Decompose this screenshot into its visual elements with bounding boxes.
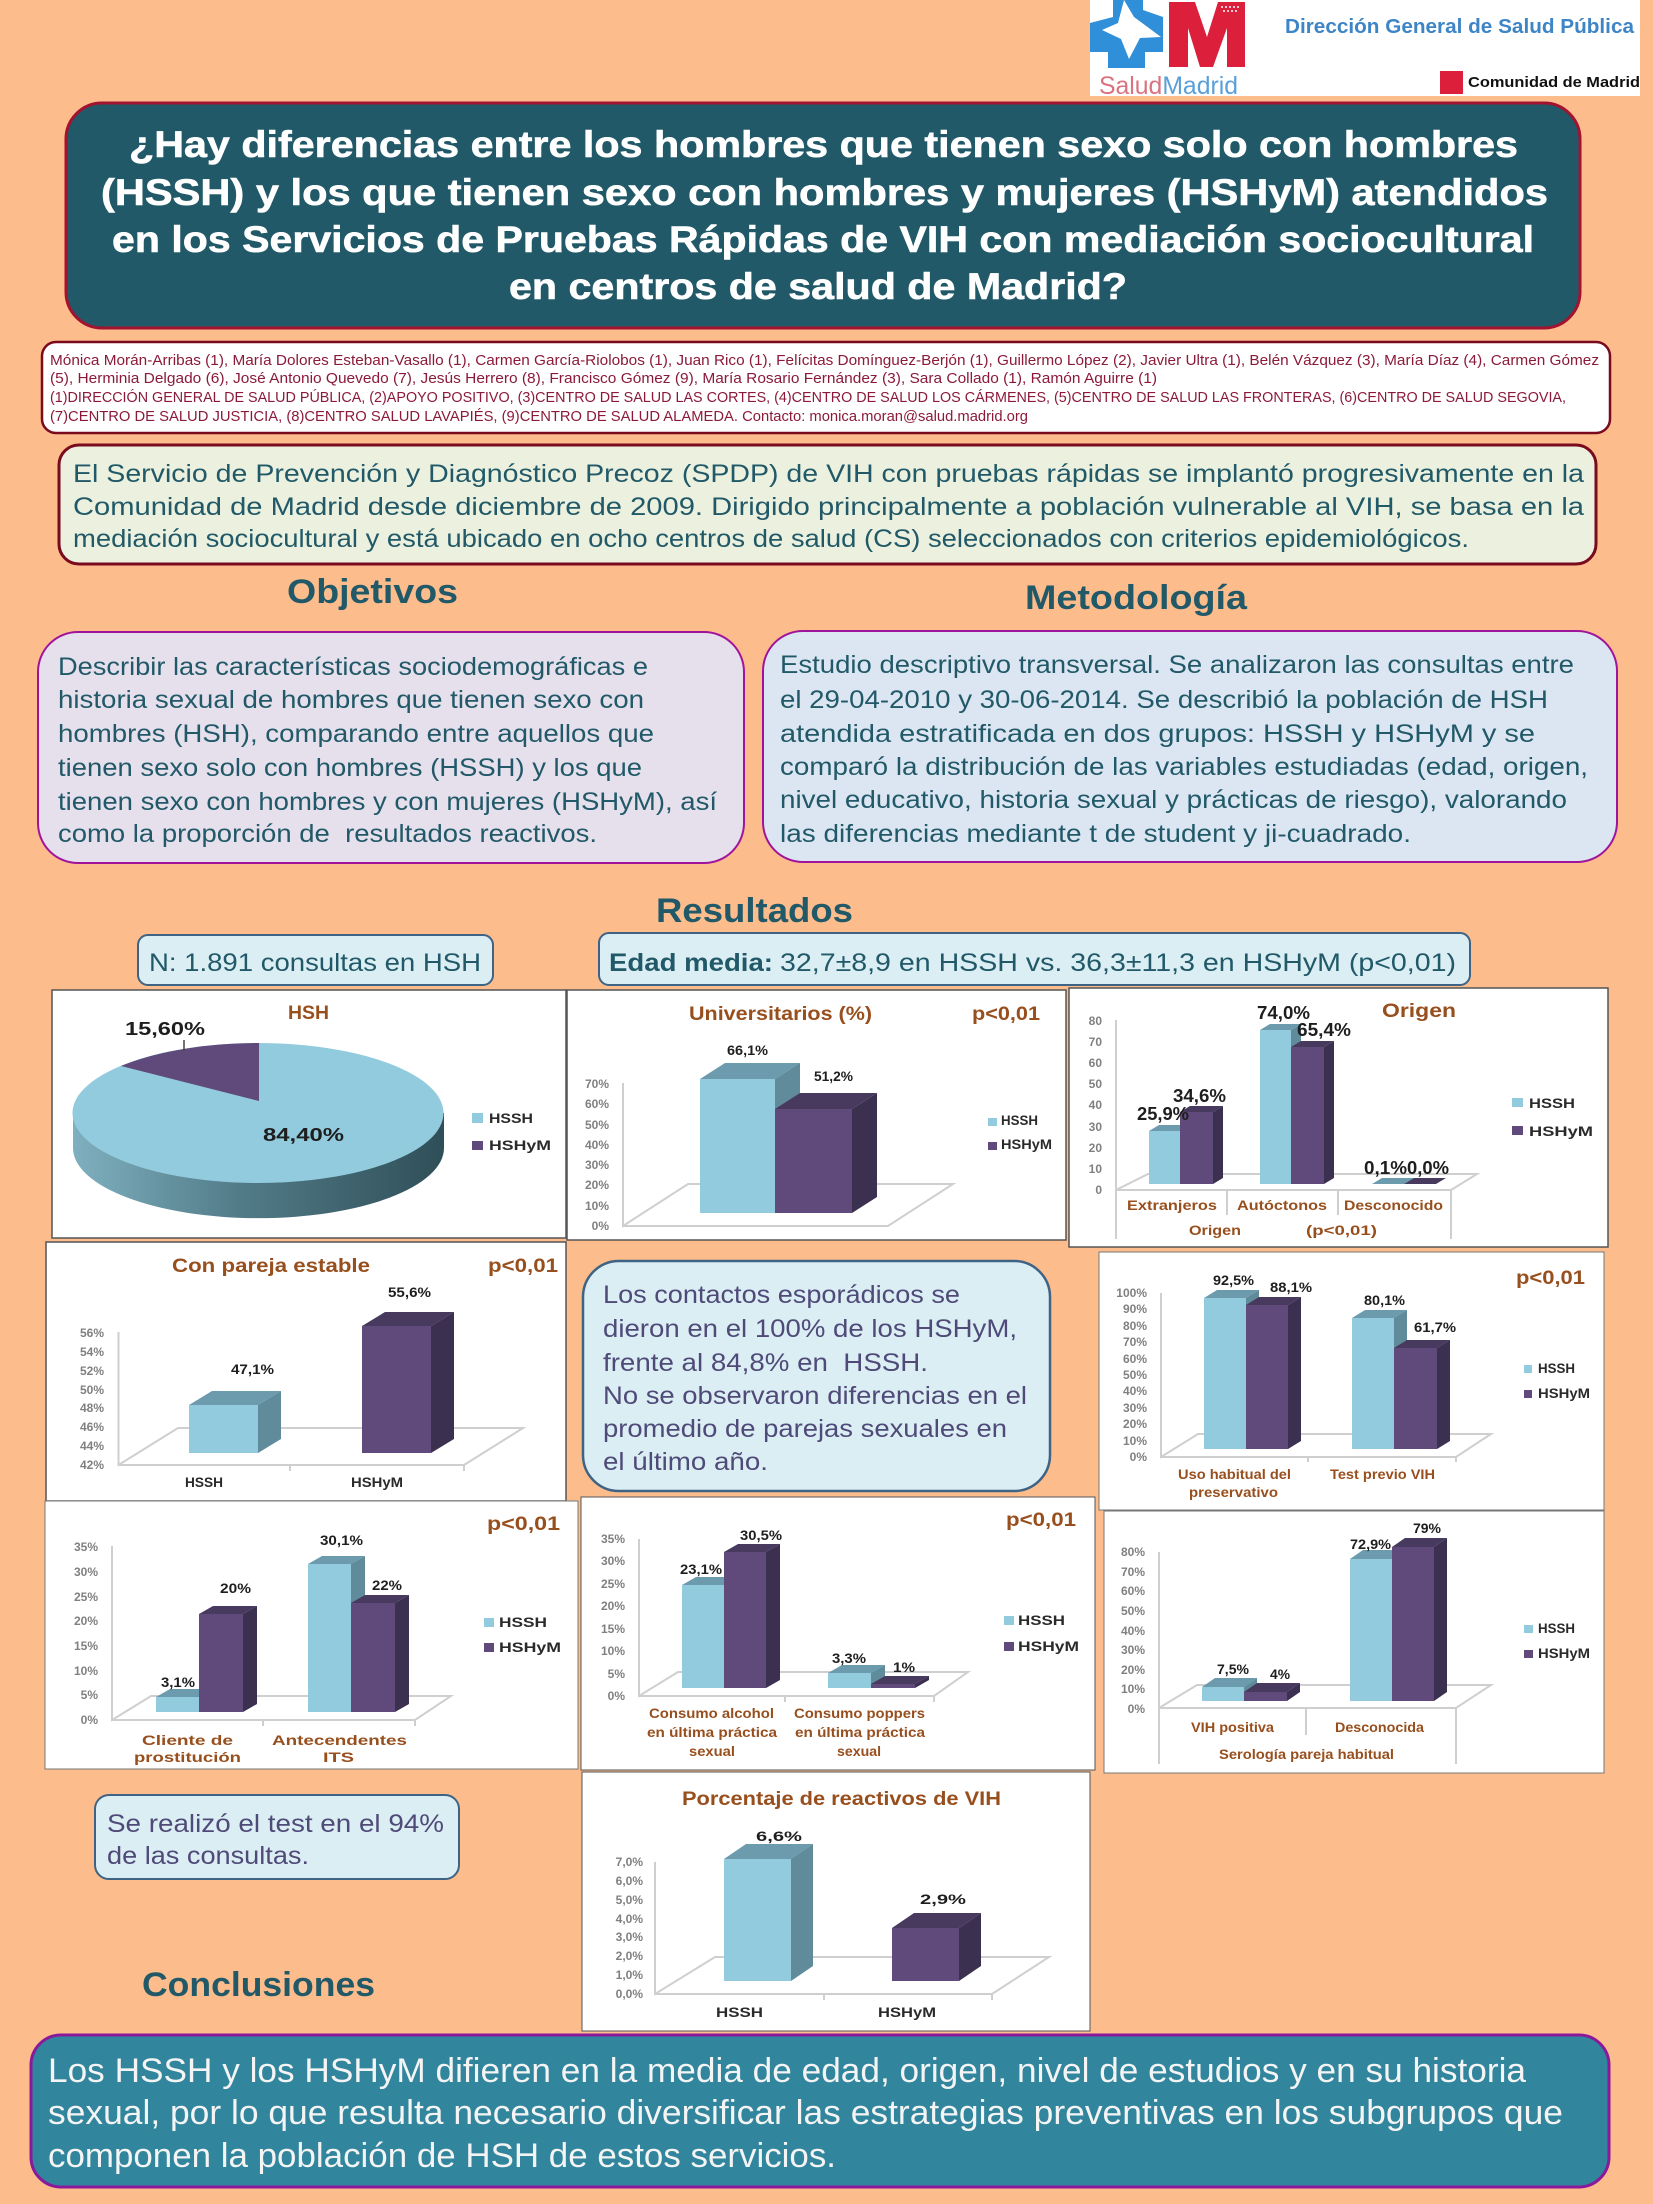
category labels: VIH positiva	[1191, 1719, 1274, 1735]
authors text: Mónica Morán-Arribas (1), María Dolores Esteban-Vasallo (1), Carmen García-Riolobos (1), Juan Rico (1), Felícitas Domínguez-Berjón (1), Guillermo López (2), Javier Ultra (1), Belén Vázquez (3), María Díaz (4), Carmen Gómez	[50, 352, 1599, 369]
objetivos text	[58, 653, 717, 848]
chart: serología pareja habitual	[1104, 1511, 1604, 1773]
logo text: Dirección General de Salud Pública: Dirección General de Salud Pública	[1285, 16, 1635, 38]
legend	[1524, 1360, 1590, 1401]
category labels: HSSH	[716, 2004, 763, 2020]
value labels: 3,1%	[161, 1674, 196, 1690]
axis: 40%	[1121, 1624, 1145, 1638]
axis: 15%	[74, 1639, 98, 1653]
axis: 100%	[1116, 1286, 1147, 1300]
value labels: 3,3%	[832, 1650, 867, 1666]
value labels: 0,1%	[1364, 1158, 1407, 1178]
title text: ¿Hay diferencias entre los hombres que tienen sexo solo con hombres	[129, 124, 1518, 165]
heading: Conclusiones: Conclusiones	[142, 1966, 375, 2004]
chart: cliente de prostitución y antecedentes ITS	[45, 1501, 578, 1769]
axis: 20%	[74, 1614, 98, 1628]
axis: 70	[1089, 1035, 1102, 1049]
axis: 20	[1089, 1141, 1102, 1155]
axis: 48%	[80, 1401, 104, 1415]
value labels: 88,1%	[1270, 1279, 1313, 1295]
axis: 35%	[601, 1532, 625, 1546]
category labels: en última práctica	[795, 1724, 925, 1740]
objetivos text: tienen sexo con hombres y con mujeres (HSHyM), así	[58, 788, 717, 816]
metodología text: Estudio descriptivo transversal. Se analizaron las consultas entre	[780, 651, 1574, 679]
callout text: dieron en el 100% de los HSHyM,	[603, 1315, 1017, 1343]
callout text	[603, 1281, 1027, 1476]
axis: 50%	[1123, 1368, 1147, 1382]
value labels: 1%	[893, 1659, 916, 1675]
logo text: SaludMadrid: SaludMadrid	[1099, 72, 1238, 100]
heading: Resultados: Resultados	[656, 892, 853, 930]
category labels	[1191, 1719, 1424, 1762]
category labels: HSHyM	[878, 2004, 936, 2020]
metodología text: comparó la distribución de las variables estudiadas (edad, origen,	[780, 753, 1588, 781]
authors text: (7)CENTRO DE SALUD JUSTICIA, (8)CENTRO SALUD LAVAPIÉS, (9)CENTRO DE SALUD ALAMEDA. Contacto: monica.moran@salud.madrid.org	[50, 408, 1028, 425]
axis: 2,0%	[616, 1949, 643, 1963]
bars	[1202, 1538, 1447, 1701]
logo text: Comunidad de Madrid: Comunidad de Madrid	[1468, 74, 1640, 91]
category labels: sexual	[689, 1743, 735, 1759]
value labels: 65,4%	[1297, 1020, 1351, 1040]
axis: 0,0%	[616, 1987, 643, 2001]
chart: preservativo y test previo	[1099, 1252, 1604, 1510]
value labels: 79%	[1413, 1520, 1442, 1536]
axis: 7,0%	[616, 1855, 643, 1869]
category labels: Origen	[1189, 1222, 1241, 1238]
value labels: 20%	[220, 1580, 252, 1596]
value labels: 55,6%	[388, 1284, 432, 1300]
category labels	[134, 1732, 407, 1765]
axis: 10%	[1123, 1434, 1147, 1448]
value labels: 66,1%	[727, 1042, 769, 1058]
callout: N consultas	[138, 935, 493, 985]
value labels: 25,9%	[1137, 1104, 1189, 1124]
bars	[700, 1063, 877, 1213]
axis: 3,0%	[616, 1930, 643, 1944]
introduction text: mediación sociocultural y está ubicado en ocho centros de salud (CS) seleccionados con criterios epidemiológicos.	[73, 525, 1469, 553]
axis: 25%	[601, 1577, 625, 1591]
axis: 30%	[1121, 1643, 1145, 1657]
category labels: prostitución	[134, 1749, 241, 1765]
callout: edad media	[599, 933, 1470, 985]
objetivos text: hombres (HSH), comparando entre aquellos que	[58, 720, 654, 748]
chart title: Origen	[1382, 1001, 1456, 1022]
legend: HSHyM	[1529, 1123, 1593, 1139]
pie labels: 15,60%	[125, 1019, 205, 1039]
icon: Comunidad de Madrid flag	[1440, 71, 1463, 94]
value labels: 80,1%	[1364, 1292, 1406, 1308]
category labels	[647, 1705, 925, 1759]
axis: 46%	[80, 1420, 104, 1434]
chart: universitarios	[567, 990, 1066, 1240]
axis: 5,0%	[616, 1893, 643, 1907]
metodología text: las diferencias mediante t de student y ji-cuadrado.	[780, 820, 1411, 848]
axis: 30	[1089, 1120, 1102, 1134]
axis: 5%	[608, 1667, 625, 1681]
axis: 50%	[80, 1383, 104, 1397]
axis: 6,0%	[616, 1874, 643, 1888]
axis: 10%	[74, 1664, 98, 1678]
p value: p<0,01	[488, 1256, 559, 1277]
callout: test realizado: de las consultas.	[107, 1842, 309, 1870]
legend: HSHyM	[1538, 1645, 1590, 1661]
bars	[724, 1844, 981, 1981]
icon: M stars	[1221, 6, 1239, 12]
axis: 30%	[585, 1158, 609, 1172]
chart title: Con pareja estable	[172, 1256, 370, 1277]
title panel	[66, 103, 1580, 328]
category labels: Uso habitual del	[1178, 1466, 1291, 1482]
title text: en centros de salud de Madrid?	[509, 266, 1127, 307]
callout text: promedio de parejas sexuales en	[603, 1415, 1007, 1443]
chart title: Porcentaje de reactivos de VIH	[682, 1789, 1001, 1810]
value labels	[231, 1284, 432, 1377]
axis: 30%	[1123, 1401, 1147, 1415]
axis: 0%	[1128, 1702, 1145, 1716]
panel: objetivos	[38, 632, 744, 863]
category labels: Cliente de	[142, 1732, 233, 1748]
callout: test realizado: Se realizó el test en el 94%	[107, 1810, 444, 1838]
heading: Metodología: Metodología	[1025, 579, 1248, 617]
axis: 80	[1089, 1014, 1102, 1028]
category labels: Test previo VIH	[1330, 1466, 1435, 1482]
value labels: 30,5%	[740, 1527, 783, 1543]
axis: 10%	[1121, 1682, 1145, 1696]
introduction text	[73, 460, 1584, 553]
objetivos text: historia sexual de hombres que tienen sexo con	[58, 686, 644, 714]
value labels	[161, 1532, 403, 1690]
value labels	[1213, 1272, 1457, 1335]
axis	[74, 1540, 451, 1727]
axis: 40	[1089, 1098, 1102, 1112]
axis: 60%	[1123, 1352, 1147, 1366]
axis: 30%	[74, 1565, 98, 1579]
conclusiones text	[48, 2052, 1563, 2175]
axis: 54%	[80, 1345, 104, 1359]
axis	[616, 1855, 1049, 2001]
legend: HSHyM	[1538, 1385, 1590, 1401]
category labels: preservativo	[1189, 1484, 1278, 1500]
pie labels: 84,40%	[263, 1125, 344, 1145]
metodología text	[780, 651, 1588, 848]
value labels	[756, 1828, 967, 1907]
conclusiones text: componen la población de HSH de estos servicios.	[48, 2137, 836, 2175]
legend	[484, 1614, 561, 1655]
axis: 60	[1089, 1056, 1102, 1070]
conclusiones text: sexual, por lo que resulta necesario diversificar las estrategias preventivas en los subgrupos que	[48, 2094, 1563, 2132]
axis: 5%	[81, 1688, 98, 1702]
axis: 20%	[585, 1178, 609, 1192]
axis: 50%	[585, 1118, 609, 1132]
axis: 0%	[608, 1689, 625, 1703]
axis: 0%	[1130, 1450, 1147, 1464]
legend	[1524, 1620, 1590, 1661]
axis: 40%	[1123, 1384, 1147, 1398]
metodología text: atendida estratificada en dos grupos: HSSH y HSHyM y se	[780, 720, 1535, 748]
axis: 0	[1095, 1183, 1102, 1197]
icon: white star	[1102, 0, 1161, 59]
axis: 50	[1089, 1077, 1102, 1091]
axis	[1121, 1545, 1491, 1764]
category labels	[1178, 1466, 1435, 1500]
axis: 20%	[1121, 1663, 1145, 1677]
chart: consumo alcohol y poppers	[581, 1497, 1095, 1770]
category labels: Antecendentes	[272, 1732, 407, 1748]
legend: HSSH	[1538, 1360, 1575, 1376]
category labels: Autóctonos	[1237, 1197, 1327, 1213]
axis: 30%	[601, 1554, 625, 1568]
callout text: No se observaron diferencias en el	[603, 1382, 1027, 1410]
legend: HSSH	[489, 1110, 533, 1126]
category labels: en última práctica	[647, 1724, 777, 1740]
axis	[1116, 1286, 1491, 1464]
legend: HSSH	[499, 1614, 547, 1630]
axis: 60%	[585, 1097, 609, 1111]
authors text	[50, 352, 1599, 425]
category labels: (p<0,01)	[1306, 1222, 1377, 1238]
objetivos text: tienen sexo solo con hombres (HSSH) y los que	[58, 754, 642, 782]
value labels: 0,0%	[1407, 1158, 1449, 1178]
category labels: ITS	[323, 1749, 354, 1765]
category labels: HSSH	[185, 1474, 223, 1490]
axis: 56%	[80, 1326, 104, 1340]
value labels	[727, 1042, 854, 1084]
axis: 50%	[1121, 1604, 1145, 1618]
callout text: el último año.	[603, 1448, 768, 1476]
chart: con pareja estable	[46, 1242, 566, 1501]
legend: HSSH	[1001, 1112, 1038, 1128]
p value: p<0,01	[1006, 1510, 1077, 1531]
legend: HSSH	[1538, 1620, 1575, 1636]
category labels: Consumo alcohol	[649, 1705, 774, 1721]
value labels: 6,6%	[756, 1828, 803, 1844]
value labels: 74,0%	[1257, 1003, 1310, 1023]
category labels	[1127, 1197, 1443, 1238]
metodología text: el 29-04-2010 y 30-06-2014. Se describió la población de HSH	[780, 686, 1548, 714]
axis: 20%	[1123, 1417, 1147, 1431]
legend	[1004, 1612, 1079, 1654]
callout: edad media: Edad media:	[609, 949, 773, 977]
value labels: 47,1%	[231, 1361, 275, 1377]
axis: 70%	[585, 1077, 609, 1091]
title text: en los Servicios de Pruebas Rápidas de VIH con mediación sociocultural	[112, 219, 1534, 260]
metodología text: nivel educativo, historia sexual y prácticas de riesgo), valorando	[780, 786, 1567, 814]
category labels	[716, 2004, 936, 2020]
category labels: sexual	[837, 1743, 881, 1759]
callout: contactos esporádicos	[583, 1261, 1050, 1491]
pie	[72, 1040, 444, 1218]
axis: 40%	[585, 1138, 609, 1152]
axis: 15%	[601, 1622, 625, 1636]
category labels: Extranjeros	[1127, 1197, 1217, 1213]
title text	[101, 124, 1548, 307]
axis: 25%	[74, 1590, 98, 1604]
axis: 10	[1089, 1162, 1102, 1176]
callout: N consultas: N: 1.891 consultas en HSH	[149, 949, 481, 977]
legend	[988, 1112, 1052, 1152]
chart: origen	[1069, 988, 1608, 1247]
category labels: HSHyM	[351, 1474, 403, 1490]
chart: HSH pie	[52, 990, 566, 1238]
legend: HSHyM	[499, 1639, 561, 1655]
value labels: 92,5%	[1213, 1272, 1255, 1288]
axis	[80, 1326, 523, 1472]
axis: 90%	[1123, 1302, 1147, 1316]
axis	[585, 1077, 953, 1233]
axis: 60%	[1121, 1584, 1145, 1598]
category labels: Desconocido	[1344, 1197, 1443, 1213]
value labels: 34,6%	[1173, 1086, 1226, 1106]
axis: 70%	[1121, 1565, 1145, 1579]
legend: HSHyM	[1001, 1136, 1052, 1152]
legend	[1512, 1095, 1593, 1139]
p value: p<0,01	[487, 1514, 561, 1535]
category labels: Consumo poppers	[794, 1705, 925, 1721]
callout text: Los contactos esporádicos se	[603, 1281, 960, 1309]
axis: 35%	[74, 1540, 98, 1554]
value labels	[1137, 1003, 1449, 1178]
axis: 70%	[1123, 1335, 1147, 1349]
p value: p<0,01	[1516, 1268, 1585, 1289]
pie labels	[125, 1019, 344, 1145]
introduction panel	[59, 445, 1596, 564]
legend	[472, 1110, 551, 1153]
chart title: Universitarios (%)	[689, 1004, 872, 1025]
value labels: 72,9%	[1350, 1536, 1392, 1552]
axis: 42%	[80, 1458, 104, 1472]
value labels: 2,9%	[920, 1891, 967, 1907]
panel: conclusiones	[31, 2035, 1609, 2187]
bars	[682, 1544, 929, 1688]
value labels: 30,1%	[320, 1532, 364, 1548]
legend: HSHyM	[489, 1137, 551, 1153]
value labels: 22%	[372, 1577, 403, 1593]
category labels	[185, 1474, 403, 1490]
heading: Objetivos: Objetivos	[287, 573, 458, 611]
axis: 80%	[1121, 1545, 1145, 1559]
chart: porcentaje de reactivos	[582, 1772, 1090, 2031]
introduction text: Comunidad de Madrid desde diciembre de 2009. Dirigido principalmente a población vulnerable al VIH, se basa en la	[73, 493, 1584, 521]
value labels: 7,5%	[1217, 1661, 1250, 1677]
axis: 10%	[585, 1199, 609, 1213]
introduction text: El Servicio de Prevención y Diagnóstico Precoz (SPDP) de VIH con pruebas rápidas se implantó progresivamente en la	[73, 460, 1584, 488]
objetivos text: Describir las características sociodemográficas e	[58, 653, 648, 681]
bars	[1204, 1290, 1450, 1449]
axis: 1,0%	[616, 1968, 643, 1982]
callout text: frente al 84,8% en HSSH.	[603, 1349, 928, 1377]
category labels: Desconocida	[1335, 1719, 1424, 1735]
objetivos text: como la proporción de resultados reactivos.	[58, 820, 597, 848]
conclusiones text: Los HSSH y los HSHyM difieren en la media de edad, origen, nivel de estudios y en su historia	[48, 2052, 1526, 2090]
category labels: Serología pareja habitual	[1219, 1746, 1394, 1762]
value labels: 4%	[1270, 1666, 1291, 1682]
axis: 20%	[601, 1599, 625, 1613]
value labels	[1217, 1520, 1442, 1682]
callout: test realizado	[95, 1795, 459, 1879]
axis: 80%	[1123, 1319, 1147, 1333]
bars	[156, 1556, 409, 1712]
value labels: 51,2%	[814, 1068, 854, 1084]
panel: metodología	[763, 631, 1617, 862]
value labels: 61,7%	[1414, 1319, 1457, 1335]
title text: (HSSH) y los que tienen sexo con hombres y mujeres (HSHyM) atendidos	[101, 172, 1548, 213]
authors text: (1)DIRECCIÓN GENERAL DE SALUD PÚBLICA, (2)APOYO POSITIVO, (3)CENTRO DE SALUD LAS CORTES, (4)CENTRO DE SALUD LOS CÁRMENES, (5)CENTRO DE SALUD LAS FRONTERAS, (6)CENTRO DE SALUD SEGOVIA,	[50, 389, 1566, 406]
axis: 4,0%	[616, 1912, 643, 1926]
axis: 0%	[81, 1713, 98, 1727]
axis	[1089, 1014, 1477, 1239]
logo header	[1090, 0, 1640, 100]
value labels	[680, 1527, 916, 1675]
legend: HSSH	[1018, 1612, 1065, 1628]
p value: p<0,01	[972, 1004, 1040, 1025]
bars	[1149, 1024, 1446, 1184]
icon: red M	[1169, 2, 1245, 67]
value labels: 23,1%	[680, 1561, 723, 1577]
axis: 0%	[592, 1219, 609, 1233]
legend: HSSH	[1529, 1095, 1575, 1111]
axis: 44%	[80, 1439, 104, 1453]
authors text: (5), Herminia Delgado (6), José Antonio Quevedo (7), Jesús Herrero (8), Francisco Gómez (9), María Rosario Fernández (3), Sara Collado (1), Ramón Aguirre (1)	[50, 370, 1157, 387]
axis	[601, 1532, 968, 1703]
bars	[189, 1312, 454, 1453]
authors panel	[42, 342, 1610, 433]
chart title: HSH	[288, 1003, 329, 1024]
legend: HSHyM	[1018, 1638, 1079, 1654]
callout: edad media: 32,7±8,9 en HSSH vs. 36,3±11,3 en HSHyM (p<0,01)	[780, 949, 1456, 977]
icon: SaludMadrid star	[1090, 0, 1163, 68]
axis: 52%	[80, 1364, 104, 1378]
axis: 10%	[601, 1644, 625, 1658]
